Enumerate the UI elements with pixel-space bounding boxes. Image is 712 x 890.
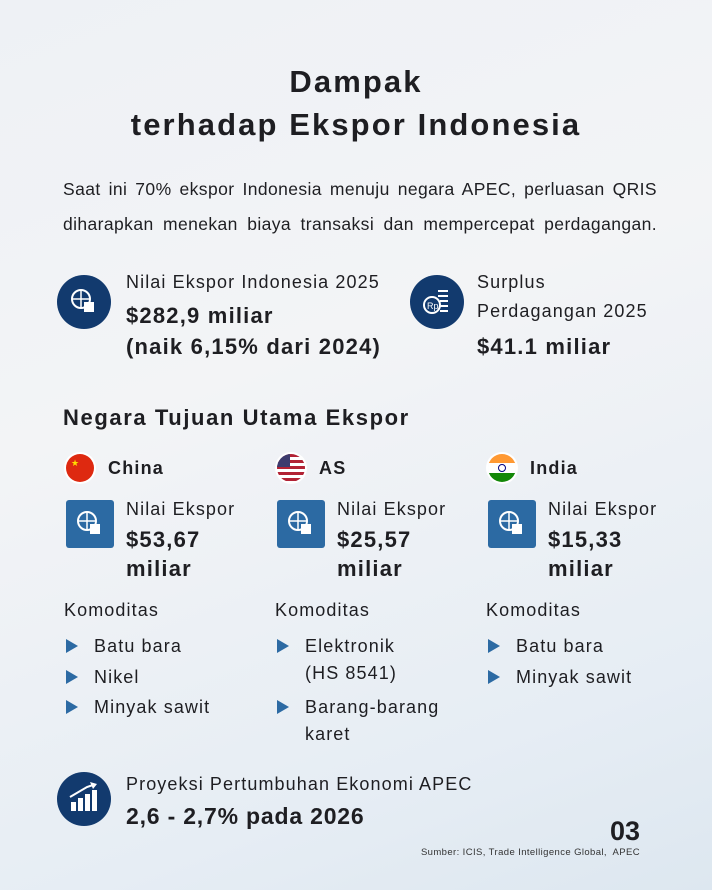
panel: AS: Komoditas <box>275 600 370 620</box>
panel: AS: karet <box>305 724 351 744</box>
stat: nilai ekspor: (naik 6,15% dari 2024) <box>126 334 381 359</box>
panel: India <box>486 452 657 687</box>
panel: China: miliar <box>126 556 192 581</box>
panel: China: Nikel <box>94 667 140 687</box>
panel: India: Nilai Ekspor <box>548 499 657 519</box>
panel: India: Minyak sawit <box>516 667 632 687</box>
panel: AS: $25,57 <box>337 527 412 552</box>
flag usa <box>277 454 305 482</box>
panel: China <box>64 452 235 717</box>
panel: India: Batu bara <box>516 636 604 656</box>
panel: China: Batu bara <box>94 636 182 656</box>
stat: nilai ekspor <box>57 272 381 359</box>
panel: AS: AS <box>319 458 346 478</box>
panel: India: $15,33 <box>548 527 622 552</box>
stat: surplus <box>410 272 648 359</box>
panel: India: miliar <box>548 556 614 581</box>
icon: globe box <box>57 275 111 329</box>
intro text: Saat ini 70% ekspor Indonesia menuju negara APEC, perluasan QRIS diharapkan menekan biaya transaksi dan mempercepat perdagangan. <box>63 179 657 234</box>
stat: proyeksi <box>57 772 472 829</box>
icon: coins <box>410 275 464 329</box>
stat: proyeksi: Proyeksi Pertumbuhan Ekonomi APEC <box>126 774 472 794</box>
section heading: Negara Tujuan Utama Ekspor <box>63 405 410 430</box>
panel: AS: Barang-barang <box>305 697 439 717</box>
panel: AS: (HS 8541) <box>305 663 397 683</box>
icon: coins: Rp <box>427 301 439 311</box>
stat: nilai ekspor: Nilai Ekspor Indonesia 2025 <box>126 272 380 292</box>
page number: 03 <box>610 816 640 846</box>
panel: China: Nilai Ekspor <box>126 499 235 519</box>
stat: surplus: Surplus <box>477 272 546 292</box>
stat: proyeksi: 2,6 - 2,7% pada 2026 <box>126 803 364 829</box>
panel: China: Komoditas <box>64 600 159 620</box>
icon square <box>488 500 536 548</box>
stat: surplus: $41.1 miliar <box>477 334 611 359</box>
panel: AS <box>275 452 446 744</box>
stat: nilai ekspor: $282,9 miliar <box>126 303 274 328</box>
title <box>131 64 581 142</box>
title: Dampak <box>289 64 423 99</box>
icon: growth chart <box>57 772 111 826</box>
flag china <box>66 454 94 482</box>
panel: AS: miliar <box>337 556 403 581</box>
panel: AS: Nilai Ekspor <box>337 499 446 519</box>
panel: China: China <box>108 458 164 478</box>
panel: China: Minyak sawit <box>94 697 210 717</box>
flag india <box>488 454 516 482</box>
title: terhadap Ekspor Indonesia <box>131 107 581 142</box>
panel: China: $53,67 <box>126 527 200 552</box>
icon square <box>277 500 325 548</box>
panel: India: India <box>530 458 578 478</box>
source: Sumber: ICIS, Trade Intelligence Global, APEC <box>421 847 640 858</box>
panel: AS: Elektronik <box>305 636 395 656</box>
icon square <box>66 500 114 548</box>
panel: India: Komoditas <box>486 600 581 620</box>
stat: surplus: Perdagangan 2025 <box>477 301 648 321</box>
flag china: ★ <box>71 458 79 468</box>
